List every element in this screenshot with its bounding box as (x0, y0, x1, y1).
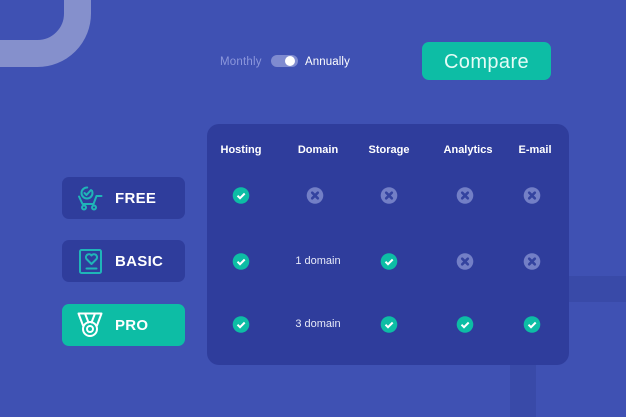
label: annually: Annually (305, 56, 350, 68)
icon: cart with check (78, 186, 102, 210)
pro plan row (232, 316, 540, 333)
label: monthly: Monthly (220, 56, 262, 68)
compare button (422, 42, 551, 80)
icon: framed heart (79, 249, 102, 274)
label: FREE (115, 190, 156, 207)
pro domain value: 3 domain (295, 318, 341, 330)
comparison table panel (207, 124, 569, 365)
column heading: e-mail: E-mail (518, 144, 552, 156)
decorative band bottom (510, 350, 536, 417)
label: PRO (115, 317, 148, 334)
column heading: storage: Storage (369, 144, 409, 156)
plan: pro (62, 304, 185, 346)
decorative band right (560, 276, 626, 302)
compare button: Compare (444, 51, 529, 73)
label: BASIC (115, 253, 163, 270)
plan: basic (62, 240, 185, 282)
plan: free (62, 177, 185, 219)
basic plan row (232, 253, 540, 270)
column heading: domain: Domain (298, 144, 338, 156)
free plan row (232, 187, 540, 204)
column heading: analytics: Analytics (444, 144, 492, 156)
toggle switch (271, 55, 298, 67)
decorative rounded stroke top-left (0, 0, 91, 67)
billing toggle (220, 55, 350, 68)
icon: medal (78, 312, 102, 337)
column heading: hosting: Hosting (221, 144, 261, 156)
basic domain value: 1 domain (295, 255, 341, 267)
